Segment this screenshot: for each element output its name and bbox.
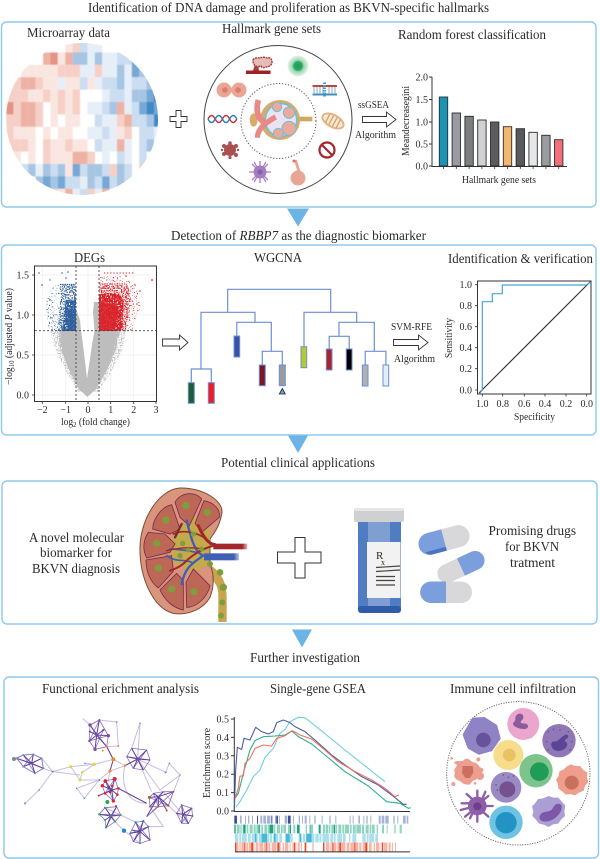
chart: ROC curve: 0.8 bbox=[460, 301, 472, 312]
icon: pink neuron cell bbox=[290, 160, 306, 186]
chart: volcano plot: −log bbox=[4, 367, 15, 385]
chart: bar chart mean decrease gini: 1.0 bbox=[416, 118, 428, 128]
chart: GSEA enrichment curves bbox=[202, 714, 411, 852]
chart: bar chart mean decrease gini: 1.5 bbox=[416, 95, 428, 106]
chart: ROC curve: 1.0 bbox=[460, 280, 472, 291]
chart: volcano plot: (adjusted bbox=[4, 320, 15, 361]
heading: identification and verification: Identification & verification bbox=[448, 251, 593, 266]
heading: immune cell infiltration: Immune cell infiltration bbox=[450, 681, 576, 696]
chart: ROC curve: 0.6 bbox=[460, 322, 472, 333]
heading: single-gene GSEA: Single-gene GSEA bbox=[270, 681, 366, 696]
icon: marker triangle bbox=[279, 388, 285, 394]
chart: enrichment network bbox=[12, 718, 193, 844]
illustration: pill bottle bbox=[354, 508, 404, 613]
chart: GSEA enrichment curves: 0.2 bbox=[216, 770, 229, 781]
cell: purple macrophage bbox=[464, 719, 499, 753]
arrow: down 2 bbox=[288, 436, 308, 453]
chart: volcano plot: P value) bbox=[4, 287, 15, 320]
label: SVM-RFE: SVM-RFE bbox=[391, 322, 432, 333]
icon: dna helix bbox=[208, 116, 237, 122]
panel: clinical applications bbox=[2, 481, 597, 624]
title: step 3: Potential clinical applications bbox=[221, 455, 375, 470]
chart: GSEA enrichment curves: 0.4 bbox=[216, 733, 229, 744]
text: biomarker description: BKVN diagnosis bbox=[32, 561, 120, 576]
title: step 2: Detection of RBBP7 as the diagnostic biomarker bbox=[171, 228, 426, 243]
panel: hallmarks identification bbox=[0, 21, 596, 207]
heading: hallmark gene sets: Hallmark gene sets bbox=[222, 21, 321, 36]
chart: bar chart mean decrease gini: Meandecreasegini bbox=[401, 86, 412, 156]
icon: mitochondrion bbox=[319, 109, 347, 133]
chart: volcano plot: 1.5 bbox=[16, 270, 29, 282]
cell: salmon apoptotic debris bbox=[450, 757, 484, 786]
chart: bar chart mean decrease gini: 0.5 bbox=[416, 140, 428, 150]
chart: volcano plot: 2 bbox=[73, 421, 77, 429]
chart: ROC curve: 0.8 bbox=[496, 399, 509, 410]
panel: biomarker detection bbox=[2, 245, 596, 435]
chart: GSEA enrichment curves: 0.0 bbox=[216, 806, 229, 818]
chart: volcano plot: −2 bbox=[37, 405, 48, 416]
chart: circular heatmap bbox=[6, 43, 158, 195]
chart: volcano plot: 10 bbox=[8, 360, 16, 367]
heading: functional enrichment: Functional erichment analysis bbox=[42, 681, 199, 696]
icon: arrow bbox=[362, 112, 396, 127]
cell: violet bbox=[491, 772, 521, 803]
chart: ROC curve: 0.2 bbox=[460, 364, 472, 375]
label: algorithm: Algorithm bbox=[394, 354, 435, 365]
title: step 1: Identification of DNA damage and proliferation as BKVN-specific hallmarks bbox=[88, 0, 489, 15]
chart: ROC curve: 0.6 bbox=[518, 399, 531, 410]
chart: volcano plot: 1 bbox=[108, 405, 113, 416]
icon: plus sign bbox=[170, 110, 187, 128]
chart: GSEA barcode rows bbox=[234, 820, 411, 852]
chart: volcano plot: 0.0 bbox=[16, 390, 29, 402]
arrow: down 1 bbox=[287, 208, 309, 226]
chart: bar chart mean decrease gini: Hallmark gene sets bbox=[462, 175, 536, 186]
text: drugs description bbox=[488, 523, 576, 570]
chart: volcano plot: 0 bbox=[86, 405, 90, 416]
chart: ROC curve: Sensitivity bbox=[444, 318, 455, 358]
illustration: capsules bbox=[416, 523, 488, 603]
chart: volcano plot: 1.0 bbox=[16, 310, 29, 322]
icon: purple spiky cell bbox=[249, 161, 271, 183]
chart: GSEA enrichment curves: Enrichment score bbox=[202, 727, 213, 798]
chart: volcano plot: (fold change) bbox=[77, 417, 130, 428]
label: algorithm: Algorithm bbox=[355, 130, 396, 141]
diagram: hallmark circle with icons bbox=[204, 46, 352, 194]
arrow: down 3 bbox=[292, 630, 312, 648]
chart: GSEA enrichment curves: 0.3 bbox=[216, 751, 229, 762]
heading: WGCNA: WGCNA bbox=[254, 250, 302, 265]
cell: yellow bbox=[493, 740, 523, 770]
heading: microarray data: Microarray data bbox=[27, 25, 110, 40]
cell: dark granulocyte bbox=[542, 724, 576, 757]
icon: arrow bbox=[394, 335, 428, 350]
chart: ROC curve: 0.4 bbox=[460, 343, 472, 354]
cell: pink neutrophil bbox=[507, 708, 539, 740]
chart: volcano plot bbox=[4, 266, 158, 429]
panel: further investigation bbox=[4, 677, 598, 858]
text: biomarker description: biomarker for bbox=[40, 545, 112, 560]
illustration: immune cells bbox=[447, 702, 590, 845]
illustration: pill bottle: R bbox=[376, 550, 384, 562]
heading: DEGs: DEGs bbox=[74, 250, 105, 265]
chart: ROC curve bbox=[444, 280, 593, 423]
cell: lavender bbox=[532, 796, 565, 827]
illustration: pill bottle: x bbox=[381, 558, 385, 567]
chart: GSEA enrichment curves: 0.1 bbox=[216, 788, 229, 799]
text: drugs description: Promising drugs bbox=[488, 523, 576, 538]
diagram: dendrogram bbox=[188, 289, 389, 403]
icon: plus sign bbox=[278, 538, 321, 578]
chart: volcano plot: 2 bbox=[131, 405, 136, 416]
chart: bar chart mean decrease gini bbox=[401, 72, 567, 186]
chart: ROC curve: 0.0 bbox=[460, 386, 472, 396]
chart: ROC curve: 0.0 bbox=[580, 399, 593, 410]
icon: prohibition sign bbox=[320, 142, 334, 158]
chart: volcano plot: 0.5 bbox=[16, 350, 29, 362]
chart: ROC curve: Specificity bbox=[514, 412, 555, 423]
heading: random forest: Random forest classification bbox=[398, 27, 546, 42]
cell: dendritic bbox=[461, 791, 493, 822]
chart: ROC curve: 0.4 bbox=[539, 399, 551, 410]
text: biomarker description bbox=[29, 530, 124, 576]
icon: red tree bbox=[246, 57, 272, 74]
chart: ROC curve: 1.0 bbox=[476, 399, 489, 410]
icon: membrane with dna bbox=[312, 82, 337, 98]
chart: volcano plot: log bbox=[61, 417, 74, 428]
cell: salmon spiky bbox=[556, 764, 588, 795]
illustration: kidney bbox=[140, 488, 247, 622]
chart: ROC curve: 0.2 bbox=[560, 399, 572, 410]
icon: central organ bbox=[250, 100, 312, 140]
text: biomarker description: A novel molecular bbox=[29, 530, 124, 545]
text: drugs description: for BKVN bbox=[505, 539, 559, 554]
chart: bar chart mean decrease gini: 2.0 bbox=[416, 72, 428, 84]
icon: dividing cells bbox=[216, 82, 246, 98]
text: drugs description: tratment bbox=[510, 555, 555, 570]
chart: bar chart mean decrease gini: 0.0 bbox=[416, 162, 428, 172]
icon: arrow bbox=[162, 335, 188, 350]
chart: GSEA enrichment curves: 0.5 bbox=[216, 714, 229, 726]
title: step 4: Further investigation bbox=[250, 650, 360, 665]
label: ssGSEA: ssGSEA bbox=[358, 100, 390, 111]
icon: apoptotic cell bbox=[221, 141, 239, 159]
chart: volcano plot: 3 bbox=[154, 405, 158, 416]
icon: green glowing cell bbox=[288, 56, 308, 76]
chart: volcano plot: −1 bbox=[60, 405, 71, 416]
cell: blue bbox=[489, 806, 523, 839]
cell: green bbox=[519, 754, 553, 787]
